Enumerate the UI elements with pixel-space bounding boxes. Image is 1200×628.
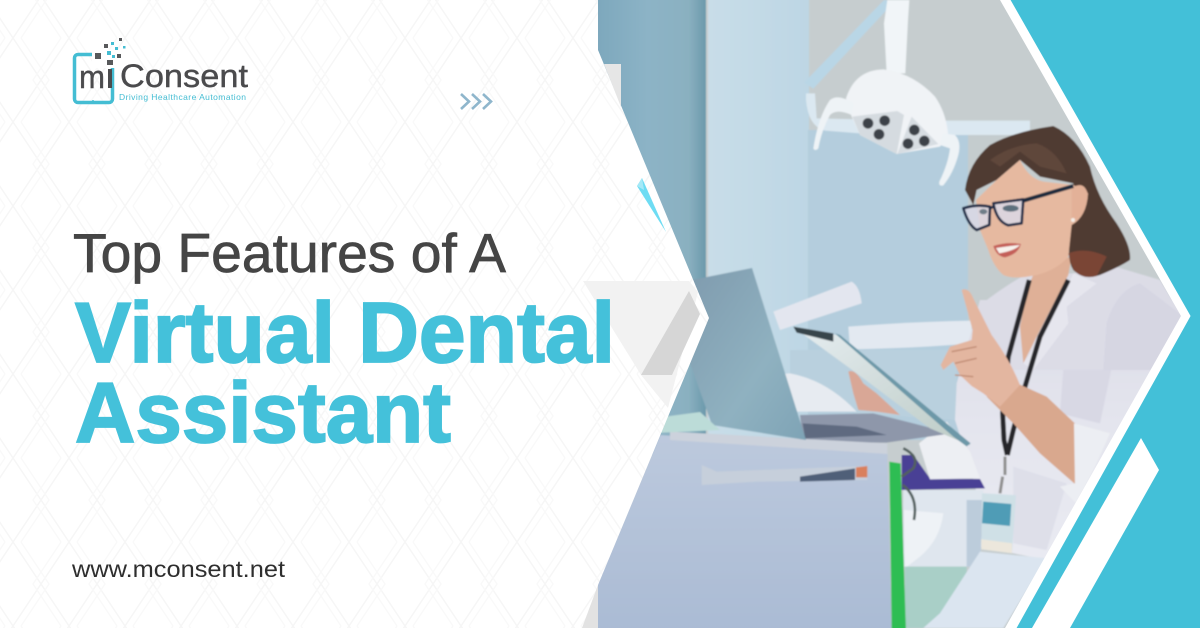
neck and chest skin xyxy=(1020,257,1072,363)
title line 1: Top Features of A xyxy=(73,222,506,284)
cart cabinet xyxy=(593,435,892,628)
lower scene foreground: desk, laptop, tablet, hands xyxy=(593,280,1110,628)
finger shadow lines xyxy=(952,347,977,377)
tablet xyxy=(793,327,971,446)
gray rectangle accent xyxy=(604,64,621,107)
hand holding tablet xyxy=(848,371,900,415)
white chevron stroke around photo xyxy=(1000,0,1190,628)
logo m letter: m xyxy=(79,59,105,95)
upper tube xyxy=(773,282,862,330)
round teal table xyxy=(655,412,720,433)
handle orange reflection xyxy=(856,466,867,477)
left coat cuff xyxy=(919,422,980,479)
lamp right handle xyxy=(939,133,959,186)
ear xyxy=(1073,184,1088,217)
laptop keyboard deck xyxy=(800,413,952,443)
lanyard clip xyxy=(1000,457,1005,493)
lamp support arm xyxy=(804,0,890,89)
light gray corner slivers xyxy=(582,585,598,628)
lamp left handle xyxy=(813,97,853,150)
lamp dome xyxy=(846,69,948,154)
logo tagline: Driving Healthcare Automation xyxy=(119,92,246,102)
green cart leg xyxy=(889,462,906,628)
blue wall under tube xyxy=(790,350,957,420)
logo wordmark: Consent xyxy=(120,58,248,94)
window curtain xyxy=(590,0,706,455)
laptop screen back xyxy=(690,268,806,440)
plastic bag xyxy=(904,510,943,568)
lamp vertical post xyxy=(884,0,909,73)
chrome hook xyxy=(902,448,915,520)
hair reddish tips xyxy=(1068,251,1107,277)
logo xyxy=(74,38,248,102)
cabinet handle xyxy=(702,465,867,485)
handle dark reflection xyxy=(800,468,855,482)
coat shoulders xyxy=(988,267,1172,300)
logo tablet outline xyxy=(74,54,112,102)
title line 2: Virtual Dental xyxy=(75,286,615,381)
logo tablet home dot xyxy=(92,100,94,102)
photo backdrop wall xyxy=(644,0,1172,628)
cabinet chrome edge xyxy=(670,432,887,454)
side panel xyxy=(967,500,983,567)
dark gray parallelogram accent xyxy=(641,291,700,375)
diamond lattice background pattern xyxy=(0,0,710,628)
logo mask behind squares xyxy=(92,50,118,68)
green base xyxy=(905,567,967,628)
desk drawer xyxy=(903,490,983,567)
photo: dentist with laptop and tablet xyxy=(590,0,1200,628)
lower scene background: tubes, wall, coat xyxy=(773,281,1150,558)
lamp lens pad left xyxy=(852,111,904,154)
cyan triangle accent xyxy=(637,178,666,232)
keyboard keys xyxy=(803,423,887,438)
teeth xyxy=(996,245,1020,253)
dentist face xyxy=(976,160,1088,277)
title line 3: Assistant xyxy=(75,366,451,461)
earring xyxy=(1071,218,1075,222)
lower right wall xyxy=(968,130,1028,330)
lanyard strand right xyxy=(1007,280,1068,455)
horizontal tube xyxy=(848,321,972,349)
id badge xyxy=(981,493,1016,553)
lamp horizontal bar xyxy=(806,93,1030,135)
white pillow xyxy=(785,372,856,412)
teal right panel xyxy=(1010,0,1200,628)
coat lower body xyxy=(954,300,1150,558)
coat sleeve shading xyxy=(1103,283,1182,370)
dentist hair xyxy=(965,126,1130,277)
lanyard strand left xyxy=(1003,280,1029,455)
upper body of dentist xyxy=(963,126,1182,370)
pointing hand xyxy=(941,289,1020,407)
wall pillar xyxy=(708,0,809,455)
dental lamp xyxy=(804,0,1030,186)
chevron arrows xyxy=(461,94,491,109)
glasses xyxy=(963,186,1073,230)
purple cloth xyxy=(902,455,985,490)
website url: www.mconsent.net xyxy=(71,556,286,582)
logo pixel squares xyxy=(95,38,126,65)
coat lower shadow xyxy=(1014,484,1065,549)
right sleeve cuff xyxy=(1060,423,1110,503)
coat collar xyxy=(1023,273,1097,370)
hair highlight xyxy=(990,143,1067,173)
lamp lens dots xyxy=(863,115,930,149)
gray triangle accent xyxy=(583,281,698,408)
white trousers xyxy=(923,552,1047,628)
coat pocket fold xyxy=(1061,371,1110,422)
lamp lens pad right xyxy=(897,117,938,154)
blue cabinet behind xyxy=(808,130,968,440)
forearm xyxy=(987,382,1078,484)
white stripe in teal panel xyxy=(1032,438,1159,628)
logo i letter xyxy=(108,69,112,88)
mouth xyxy=(993,243,1021,257)
